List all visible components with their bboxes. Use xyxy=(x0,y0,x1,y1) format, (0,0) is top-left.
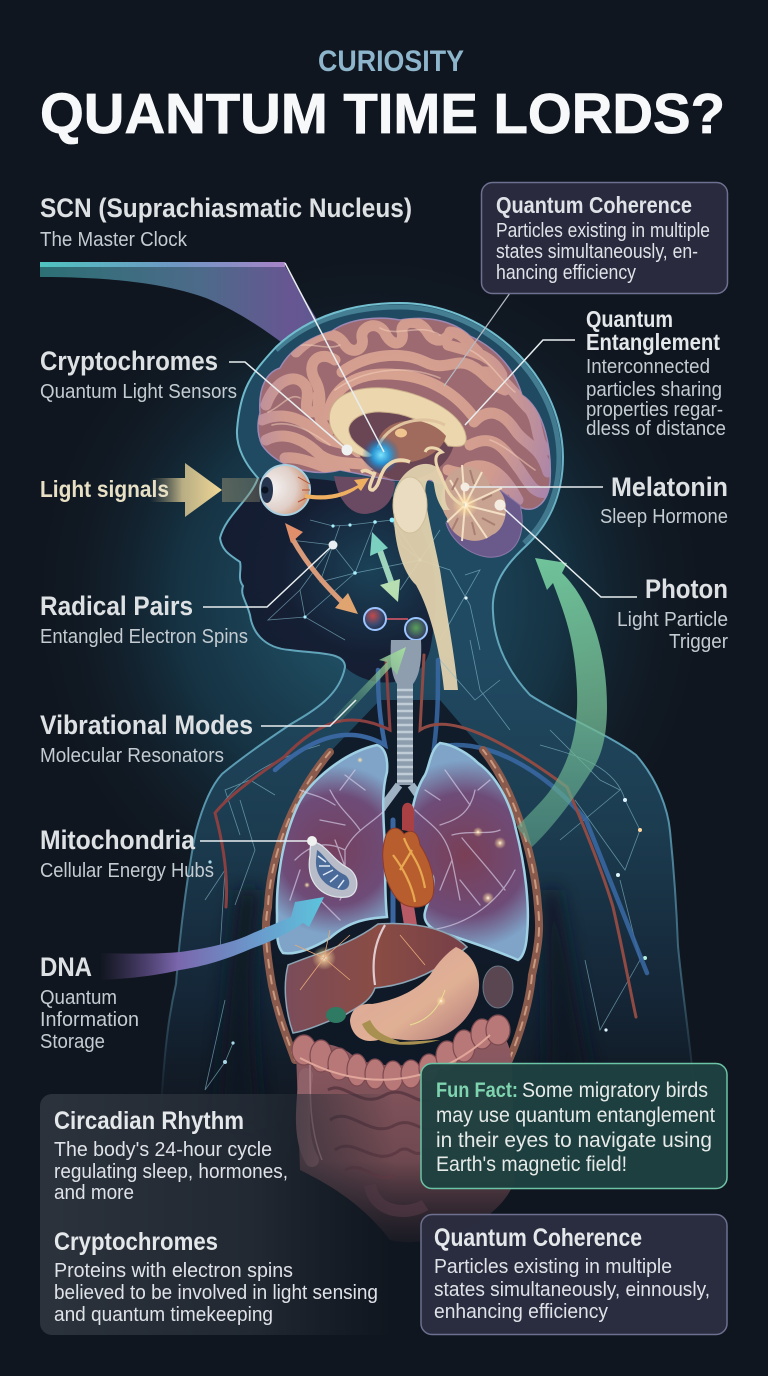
label: vibrational modes xyxy=(40,710,253,767)
cerebrum base xyxy=(258,318,550,509)
background glow xyxy=(20,240,720,960)
label: cryptochromes: Cryptochromes xyxy=(40,346,218,376)
panel: quantum coherence bottom: Particles existing in multiple xyxy=(434,1256,672,1278)
right lung xyxy=(410,743,528,960)
label: cryptochromes xyxy=(40,346,237,403)
body outline xyxy=(161,303,697,1115)
green double arrow xyxy=(370,532,400,602)
panel: definitions: Circadian Rhythm xyxy=(54,1107,244,1135)
label: light signals: Light signals xyxy=(40,476,169,502)
panel: fun fact: may use quantum entanglement xyxy=(436,1104,715,1127)
panel: quantum coherence top: hancing efficiency xyxy=(496,262,636,284)
panel: quantum coherence bottom: Quantum Coherence xyxy=(434,1224,642,1252)
orange double arrow xyxy=(285,523,358,614)
label: photon: Photon xyxy=(645,574,728,604)
label: cryptochromes: Quantum Light Sensors xyxy=(40,381,237,403)
label: radical pairs xyxy=(40,591,248,648)
panel: fun fact: Fun Fact: xyxy=(436,1079,518,1102)
mitochondrion xyxy=(309,842,357,897)
panel: fun fact: in their eyes to navigate using xyxy=(436,1129,712,1152)
heart xyxy=(383,828,434,907)
brainstem xyxy=(394,464,458,690)
pituitary stalk xyxy=(361,460,410,490)
eye to brain arrow xyxy=(305,478,369,500)
panel: fun fact: Earth's magnetic field! xyxy=(436,1153,627,1176)
neural network in face and neck xyxy=(268,518,480,650)
label: quantum entanglement: properties regar- xyxy=(586,399,723,421)
label: quantum entanglement xyxy=(586,306,726,440)
panel: definitions: and more xyxy=(54,1182,134,1204)
face shading xyxy=(220,477,436,683)
label: vibrational modes: Vibrational Modes xyxy=(40,710,253,740)
label: dna: DNA xyxy=(40,952,92,982)
label: melatonin xyxy=(600,472,728,528)
label: melatonin: Sleep Hormone xyxy=(600,506,728,528)
aorta xyxy=(402,803,414,832)
panel: definitions xyxy=(40,1094,395,1335)
spleen xyxy=(483,966,513,1008)
vibrational modes arrow xyxy=(333,647,406,722)
arm gaps xyxy=(217,890,599,1130)
panel: quantum coherence bottom: enhancing efficiency xyxy=(434,1301,608,1323)
label: mitochondria: Cellular Energy Hubs xyxy=(40,860,214,882)
label: dna: Information xyxy=(40,1009,139,1031)
eyebrow heading: CURIOSITY xyxy=(318,45,464,78)
brain xyxy=(258,318,550,690)
panel: quantum coherence bottom xyxy=(421,1214,727,1334)
panel: quantum coherence top: Particles existing in multiple xyxy=(496,220,710,242)
label: radical pairs: Entangled Electron Spins xyxy=(40,626,248,648)
temporal lobe xyxy=(334,476,395,514)
trachea xyxy=(382,640,426,808)
panel: fun fact: Some migratory birds xyxy=(522,1079,708,1102)
panel: quantum coherence top: Quantum Coherence xyxy=(496,192,692,218)
label: dna: Quantum xyxy=(40,987,117,1009)
thalamus xyxy=(378,420,446,463)
panel: fun fact xyxy=(421,1064,727,1188)
corpus callosum xyxy=(329,388,466,457)
panel: quantum coherence top xyxy=(482,182,728,294)
label: scn xyxy=(40,193,412,251)
peripheral nerves xyxy=(205,640,647,1090)
label: scn: SCN (Suprachiasmatic Nucleus) xyxy=(40,193,412,223)
panel: definitions: believed to be involved in light sensing xyxy=(54,1282,378,1304)
label: melatonin: Melatonin xyxy=(611,472,728,502)
connector lines xyxy=(200,263,637,846)
left lung xyxy=(277,745,387,953)
light beam to eye xyxy=(222,478,260,502)
label: mitochondria xyxy=(40,825,214,882)
label: vibrational modes: Molecular Resonators xyxy=(40,745,224,767)
blood vessels xyxy=(215,655,647,1060)
pons xyxy=(393,477,427,533)
scn gradient arrow band xyxy=(40,262,334,348)
human body silhouette xyxy=(150,303,700,1180)
panel: definitions: The body's 24-hour cycle xyxy=(54,1139,272,1161)
label: photon xyxy=(617,574,728,653)
dna arrow xyxy=(100,897,324,980)
inner brain cavity xyxy=(348,406,455,480)
label: dna xyxy=(40,952,139,1053)
panel: quantum coherence top: states simultaneously, en- xyxy=(496,241,698,263)
brain gyri xyxy=(262,322,548,500)
label: radical pairs: Radical Pairs xyxy=(40,591,193,621)
gallbladder xyxy=(326,1007,346,1023)
label: photon: Light Particle xyxy=(617,609,728,631)
panel: definitions: Proteins with electron spins xyxy=(54,1260,293,1282)
descending aorta xyxy=(400,900,417,925)
panel: quantum coherence bottom: states simultaneously, einnously, xyxy=(434,1279,710,1301)
label: quantum entanglement: dless of distance xyxy=(586,418,726,440)
cerebellum xyxy=(441,465,506,541)
panel: definitions: regulating sleep, hormones, xyxy=(54,1161,288,1183)
stomach xyxy=(350,947,479,1045)
thoracic cavity xyxy=(267,700,538,1110)
label: quantum entanglement: Interconnected xyxy=(586,356,710,378)
green curved arrow xyxy=(517,558,607,847)
label: photon: Trigger xyxy=(669,631,728,653)
label: quantum entanglement: particles sharing xyxy=(586,379,722,401)
title: QUANTUM TIME LORDS? xyxy=(40,82,725,146)
large and small intestine xyxy=(292,1015,515,1242)
cerebellum back xyxy=(446,490,522,557)
light signals arrow xyxy=(150,463,222,517)
label: mitochondria: Mitochondria xyxy=(40,825,196,855)
label: scn: The Master Clock xyxy=(40,229,188,251)
entangled electron pair xyxy=(364,608,427,640)
panel: definitions: Cryptochromes xyxy=(54,1228,218,1256)
label: dna: Storage xyxy=(40,1031,105,1053)
liver xyxy=(285,923,467,1033)
label: quantum entanglement: Quantum xyxy=(586,306,673,332)
hypothalamus glow xyxy=(362,436,400,474)
panel: definitions: and quantum timekeeping xyxy=(54,1304,273,1326)
label: quantum entanglement: Entanglement xyxy=(586,329,720,355)
eye xyxy=(260,465,310,515)
